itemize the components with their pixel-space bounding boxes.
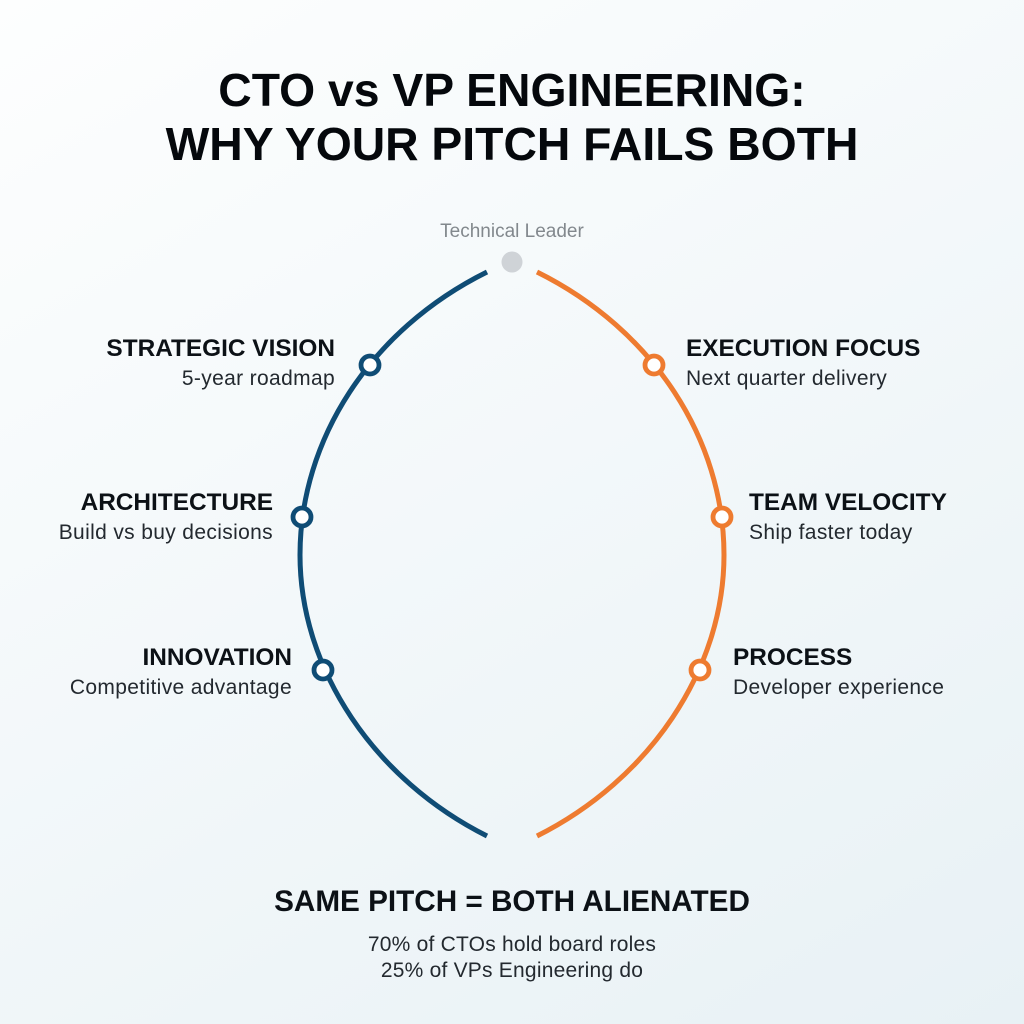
title: CTO vs VP ENGINEERING: <box>218 64 806 116</box>
label: innovation <box>70 644 292 699</box>
label: execution focus <box>686 335 920 390</box>
top node label: Technical Leader <box>440 221 584 242</box>
label: strategic vision: STRATEGIC VISION <box>106 335 335 362</box>
label: execution focus: Next quarter delivery <box>686 367 887 390</box>
label: process: PROCESS <box>733 644 852 671</box>
label: team velocity <box>749 489 947 544</box>
label: innovation: Competitive advantage <box>70 676 292 699</box>
VP nodes <box>645 356 731 679</box>
statistics: 25% of VPs Engineering do <box>381 959 643 982</box>
CTO nodes <box>293 356 379 679</box>
label: strategic vision <box>106 335 335 390</box>
label: architecture <box>59 489 273 544</box>
label: innovation: INNOVATION <box>142 644 292 671</box>
label: team velocity: Ship faster today <box>749 521 913 544</box>
top node <box>502 252 522 272</box>
label: team velocity: TEAM VELOCITY <box>749 489 947 516</box>
label: architecture: Build vs buy decisions <box>59 521 273 544</box>
statistics: 70% of CTOs hold board roles <box>368 933 656 956</box>
conclusion heading: SAME PITCH = BOTH ALIENATED <box>274 885 750 918</box>
label: strategic vision: 5-year roadmap <box>182 367 335 390</box>
VP arc <box>537 272 724 836</box>
title <box>166 64 858 170</box>
title: WHY YOUR PITCH FAILS BOTH <box>166 118 858 170</box>
label: process <box>733 644 944 699</box>
label: process: Developer experience <box>733 676 944 699</box>
label: architecture: ARCHITECTURE <box>81 489 273 516</box>
label: execution focus: EXECUTION FOCUS <box>686 335 920 362</box>
statistics <box>368 933 656 982</box>
CTO arc <box>300 272 487 836</box>
